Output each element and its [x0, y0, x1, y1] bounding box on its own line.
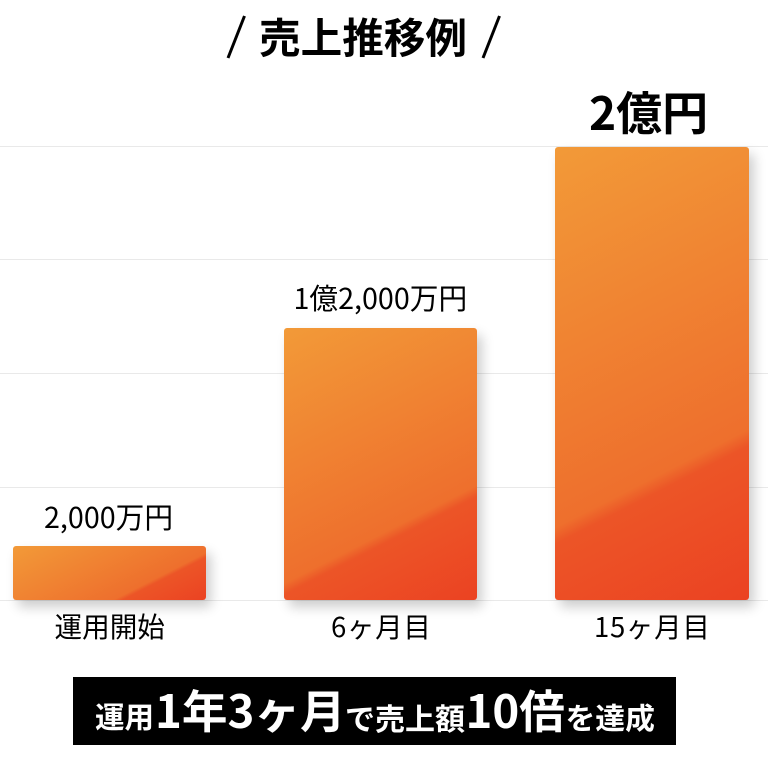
title text: 売上推移例	[259, 5, 467, 65]
value label: 2億円: 2億円	[589, 78, 708, 144]
title: 売上推移例	[226, 5, 501, 65]
banner text: 運用: 運用	[95, 695, 154, 737]
value label: 1億2,000万円: 1億2,000万円	[294, 277, 467, 318]
icon: left slash	[226, 16, 246, 58]
axis label: 15ヶ月目: 15ヶ月目	[594, 605, 711, 645]
bar: 運用開始	[13, 546, 206, 600]
bar: 6ヶ月目	[284, 328, 477, 600]
banner text: 10倍: 10倍	[466, 676, 565, 742]
axis label: 運用開始: 運用開始	[54, 605, 165, 645]
icon: right slash	[482, 16, 501, 58]
banner text: で売上額: で売上額	[345, 695, 465, 739]
value label: 2,000万円: 2,000万円	[44, 496, 173, 537]
bar: 15ヶ月目	[555, 147, 749, 600]
callout banner	[73, 677, 676, 745]
banner text: 1年3ヶ月: 1年3ヶ月	[155, 676, 346, 742]
banner text: を達成: を達成	[566, 694, 655, 738]
axis label: 6ヶ月目: 6ヶ月目	[331, 605, 432, 645]
